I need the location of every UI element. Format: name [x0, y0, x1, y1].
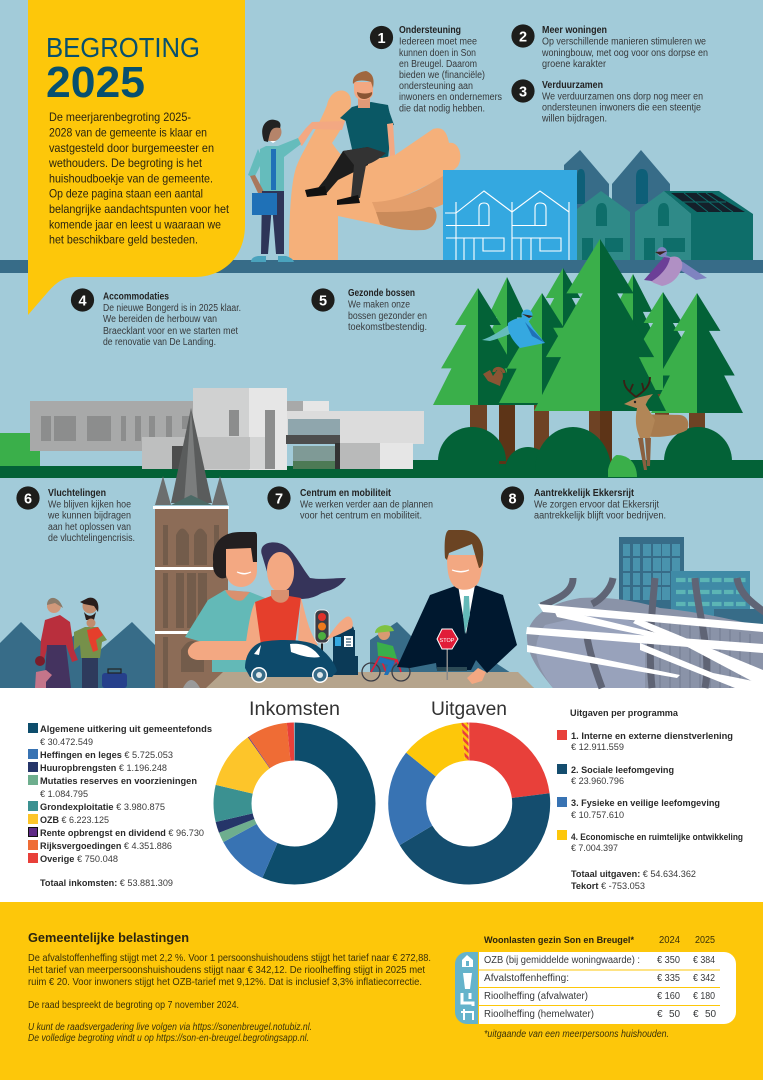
- block 5: Gezonde bossen: [311, 288, 427, 333]
- table: woonlasten: Rioolheffing (afvalwater): [484, 991, 588, 1002]
- text: gemeentelijke belastingen: De volledige begroting vindt u op https://son-en-breugel.begrotingsapp.nl.: [28, 1033, 309, 1044]
- block 6: Vluchtelingen: de vluchtelingencrisis.: [48, 533, 135, 544]
- block 8: Aantrekkelijk Ekkersrijt: 8: [508, 492, 517, 508]
- block 4: Accommodaties: We bereiden de herbouw van: [103, 314, 217, 325]
- block 7: Centrum en mobiliteit: [267, 486, 433, 522]
- text: gemeentelijke belastingen: [28, 931, 431, 1044]
- illustration: car: [245, 640, 337, 683]
- intro text: komende jaar en leest u waaraan we: [49, 218, 221, 232]
- table: woonlasten: 2025: [695, 935, 715, 946]
- table: woonlasten: Rioolheffing (hemelwater): [484, 1009, 594, 1020]
- block 4: Accommodaties: De nieuwe Bongerd is in 2025 klaar.: [103, 303, 241, 314]
- illustration: blue bird: [482, 310, 545, 348]
- block 8: Aantrekkelijk Ekkersrijt: [501, 486, 666, 522]
- legend: Uitgaven per programma: € 7.004.397: [571, 843, 618, 854]
- block 5: Gezonde bossen: bossen gezonder en: [348, 311, 427, 322]
- block 7: Centrum en mobiliteit: 7: [275, 492, 283, 508]
- legend: Inkomsten: Overige € 750.048: [40, 854, 118, 865]
- legend: Inkomsten: OZB € 6.223.125: [40, 815, 109, 826]
- illustration: purple bird: [644, 247, 707, 286]
- block 3: Verduurzamen: [511, 79, 703, 124]
- block 8: Aantrekkelijk Ekkersrijt: Aantrekkelijk Ekkersrijt: [534, 488, 635, 499]
- legend: Uitgaven per programma: [557, 708, 743, 892]
- intro text: 2028 van de gemeente is klaar en: [49, 126, 207, 140]
- illustration: green houses with solar panels: [577, 191, 753, 260]
- block 1: Ondersteuning: inwoners en ondernemers: [399, 92, 502, 103]
- intro text: wethouders. De begroting is het: [48, 157, 203, 170]
- block 1: Ondersteuning: Ondersteuning: [399, 25, 461, 36]
- block 8: Aantrekkelijk Ekkersrijt: We zorgen ervoor dat Ekkersrijt: [534, 500, 659, 510]
- illustration: bushes: [438, 427, 732, 477]
- block 4: Accommodaties: Accommodaties: [103, 292, 169, 302]
- chart title: Uitgaven: Uitgaven: [431, 698, 507, 720]
- title: 2025: [46, 58, 145, 107]
- illustration: family with suitcase: [35, 598, 127, 688]
- table: woonlasten: €: [657, 1009, 663, 1020]
- block 6: Vluchtelingen: We blijven kijken hoe: [48, 500, 131, 510]
- table: woonlasten: Afvalstoffenheffing:: [484, 973, 569, 984]
- table: woonlasten: € 384: [693, 955, 715, 966]
- illustration: back houses: [564, 150, 670, 260]
- forest ground band: [0, 433, 763, 478]
- illustration: table: [206, 672, 534, 688]
- block 4: Accommodaties: Braecklant voor en we starten met: [103, 326, 238, 337]
- intro text: belangrijke aandachtspunten voor het: [49, 203, 230, 216]
- yellow title bubble: [28, 0, 245, 315]
- legend: Inkomsten: € 30.472.549: [40, 737, 93, 748]
- illustration: squirrel: [483, 368, 504, 386]
- block 3: Verduurzamen: 3: [519, 84, 527, 100]
- legend: Inkomsten: Grondexploitatie € 3.980.875: [40, 802, 165, 813]
- legend: Uitgaven per programma: € 12.911.559: [571, 742, 624, 753]
- illustration: blueprint house: [443, 170, 577, 260]
- legend: Uitgaven per programma: Tekort € -753.053: [571, 881, 645, 892]
- block 2: Meer woningen: Meer woningen: [542, 25, 607, 36]
- legend: Uitgaven per programma: Totaal uitgaven: € 54.634.362: [571, 869, 696, 880]
- table: woonlasten: € 180: [693, 991, 715, 1002]
- intro text: het beschikbare geld besteden.: [49, 234, 198, 246]
- block 1: Ondersteuning: kunnen doen in Son: [399, 48, 476, 59]
- illustration: seated man's legs and head: [305, 71, 386, 205]
- block 1: Ondersteuning: die dat nodig hebben.: [399, 104, 485, 114]
- block 1: Ondersteuning: Iedereen moet mee: [399, 36, 477, 48]
- text: gemeentelijke belastingen: Het tarief van meerpersoonshuishoudens stijgt naar € 342,12. De rioolheffing stijgt in 2025 met: [28, 965, 425, 976]
- illustration: woman of couple: [245, 542, 346, 650]
- block 7: Centrum en mobiliteit: Centrum en mobiliteit: [300, 488, 392, 499]
- block 1: Ondersteuning: [370, 25, 502, 114]
- illustration: mountains: [0, 622, 534, 688]
- intro text: vastgesteld door burgemeester en: [49, 142, 214, 155]
- block 2: Meer woningen: 2: [519, 30, 527, 46]
- intro text: huishoudboekje van de gemeente.: [49, 172, 213, 186]
- legend: Inkomsten: Totaal inkomsten: € 53.881.309: [40, 878, 173, 889]
- block 7: Centrum en mobiliteit: voor het centrum en mobiliteit.: [300, 510, 422, 522]
- block 2: Meer woningen: Op verschillende manieren stimuleren we: [542, 36, 706, 48]
- table: woonlasten: OZB (bij gemiddelde woningwaarde) :: [484, 955, 640, 966]
- text: gemeentelijke belastingen: U kunt de raadsvergadering live volgen via https://sonenbreugel.notubiz.nl.: [28, 1022, 312, 1033]
- block 3: Verduurzamen: Verduurzamen: [542, 80, 603, 91]
- illustration: bandaged stadium: [526, 578, 763, 688]
- text: gemeentelijke belastingen: De raad bespreekt de begroting op 7 november 2024.: [28, 1000, 239, 1011]
- block 5: Gezonde bossen: We maken onze: [348, 300, 410, 310]
- table: woonlasten: [479, 935, 736, 1024]
- legend: Inkomsten: Algemene uitkering uit gemeentefonds: [40, 724, 212, 735]
- legend: Uitgaven per programma: 2. Sociale leefomgeving: [571, 765, 674, 776]
- table: woonlasten: 50: [669, 1009, 681, 1020]
- table: woonlasten: € 350: [657, 955, 680, 966]
- block 4: Accommodaties: 4: [78, 294, 87, 310]
- footnote: *uitgaande van een meerpersoons huishouden.: [484, 1029, 669, 1040]
- title: BEGROTING: [46, 32, 200, 63]
- legend: Inkomsten: Heffingen en leges € 5.725.053: [40, 750, 173, 761]
- chart title: Inkomsten: Inkomsten: [249, 698, 340, 720]
- table: woonlasten: €: [693, 1009, 699, 1020]
- title: [46, 32, 200, 107]
- legend: Uitgaven per programma: € 23.960.796: [571, 776, 624, 787]
- legend: Inkomsten: Rente opbrengst en dividend € 96.730: [40, 828, 204, 839]
- illustration: stop sign: [437, 629, 458, 680]
- block 6: Vluchtelingen: we kunnen bijdragen: [47, 510, 131, 522]
- block 6: Vluchtelingen: Vluchtelingen: [48, 488, 106, 499]
- legend: Uitgaven per programma: 1. Interne en externe dienstverlening: [571, 731, 733, 742]
- table: woonlasten: € 335: [657, 973, 680, 984]
- block 2: Meer woningen: [511, 24, 708, 70]
- block 1: Ondersteuning: en Breugel. Daarom: [399, 59, 477, 70]
- illustration: stop sign: STOP: [440, 638, 455, 644]
- legend: Inkomsten: Mutaties reserves en voorzieningen: [40, 776, 197, 787]
- table: woonlasten: € 160: [657, 991, 680, 1002]
- block 8: Aantrekkelijk Ekkersrijt: aantrekkelijk blijft voor bedrijven.: [534, 510, 666, 522]
- block 3: Verduurzamen: willen bijdragen.: [541, 114, 607, 124]
- block 6: Vluchtelingen: 6: [24, 492, 32, 508]
- illustration: giant hand: [289, 90, 460, 260]
- illustration: seated man's torso: [345, 94, 395, 158]
- illustration: man of couple: [185, 532, 265, 672]
- legend: Inkomsten: € 1.084.795: [40, 789, 88, 800]
- illustration: office buildings: [619, 537, 763, 630]
- illustration: forest trees: [433, 239, 743, 464]
- block 5: Gezonde bossen: 5: [319, 294, 327, 310]
- text: gemeentelijke belastingen: Gemeentelijke belastingen: [28, 931, 189, 945]
- illustration: traffic light and parking meter: [315, 610, 358, 675]
- block 1: Ondersteuning: bieden we (financiële): [399, 70, 485, 81]
- legend: Uitgaven per programma: 3. Fysieke en veilige leefomgeving: [571, 798, 720, 809]
- illustration: small man with folder: [248, 120, 345, 262]
- block 2: Meer woningen: woningbouw, met oog voor ons dorpse en: [541, 48, 708, 59]
- intro text: [48, 111, 230, 246]
- legend: Inkomsten: Rijksvergoedingen € 4.351.886: [40, 841, 172, 852]
- legend: Inkomsten: [28, 723, 212, 889]
- block 4: Accommodaties: de renovatie van De Landing.: [103, 337, 216, 348]
- block 1: Ondersteuning: ondersteuning aan: [399, 81, 473, 92]
- block 5: Gezonde bossen: toekomstbestendig.: [348, 322, 427, 333]
- legend: Uitgaven per programma: € 10.757.610: [571, 810, 624, 821]
- illustration: child cyclist: [362, 625, 410, 681]
- road band: [0, 260, 763, 273]
- text: gemeentelijke belastingen: De afvalstoffenheffing stijgt met 2,2 %. Voor 1 persoonshuishoudens stijgt het tarief naar € 272,88.: [28, 953, 431, 964]
- panel: yellow footer: [0, 902, 763, 1080]
- legend: Uitgaven per programma: 4. Economische en ruimtelijke ontwikkeling: [571, 832, 743, 843]
- legend: Inkomsten: Huuropbrengsten € 1.196.248: [40, 763, 167, 774]
- block 6: Vluchtelingen: aan het oplossen van: [48, 522, 131, 533]
- table: woonlasten: 50: [705, 1009, 717, 1020]
- illustration: community building: [30, 388, 424, 470]
- intro text: De meerjarenbegroting 2025-: [49, 111, 191, 124]
- block 1: Ondersteuning: 1: [377, 31, 386, 47]
- intro text: Op deze pagina staan een aantal: [49, 188, 203, 200]
- illustration: businessman: [397, 530, 517, 684]
- table: woonlasten: Woonlasten gezin Son en Breugel*: [484, 935, 634, 946]
- table: woonlasten: € 342: [693, 973, 715, 984]
- legend: Uitgaven per programma: Uitgaven per programma: [570, 708, 679, 719]
- block 2: Meer woningen: groene karakter: [542, 59, 607, 70]
- block 4: Accommodaties: [71, 288, 241, 348]
- text: gemeentelijke belastingen: ruim € 20. Voor inwoners stijgt het OZB-tarief met 9,12%. Dat is inclusief 3,3% inflatiecorrectie.: [28, 977, 422, 988]
- block 7: Centrum en mobiliteit: We werken verder aan de plannen: [300, 500, 433, 510]
- donut chart: Uitgaven: [407, 742, 531, 866]
- block 6: Vluchtelingen: [16, 486, 135, 544]
- icon strip: housing costs: [455, 952, 478, 1024]
- donut chart: Inkomsten: [232, 742, 356, 866]
- background: sky: [0, 0, 763, 688]
- illustration: deer: [624, 377, 688, 470]
- block 3: Verduurzamen: ondersteunen inwoners die een steentje: [542, 102, 701, 114]
- block 3: Verduurzamen: We verduurzamen ons dorp nog meer en: [542, 92, 703, 102]
- table: woonlasten: 2024: [659, 935, 680, 946]
- block 5: Gezonde bossen: Gezonde bossen: [348, 288, 415, 299]
- illustration: church tower: [153, 408, 229, 688]
